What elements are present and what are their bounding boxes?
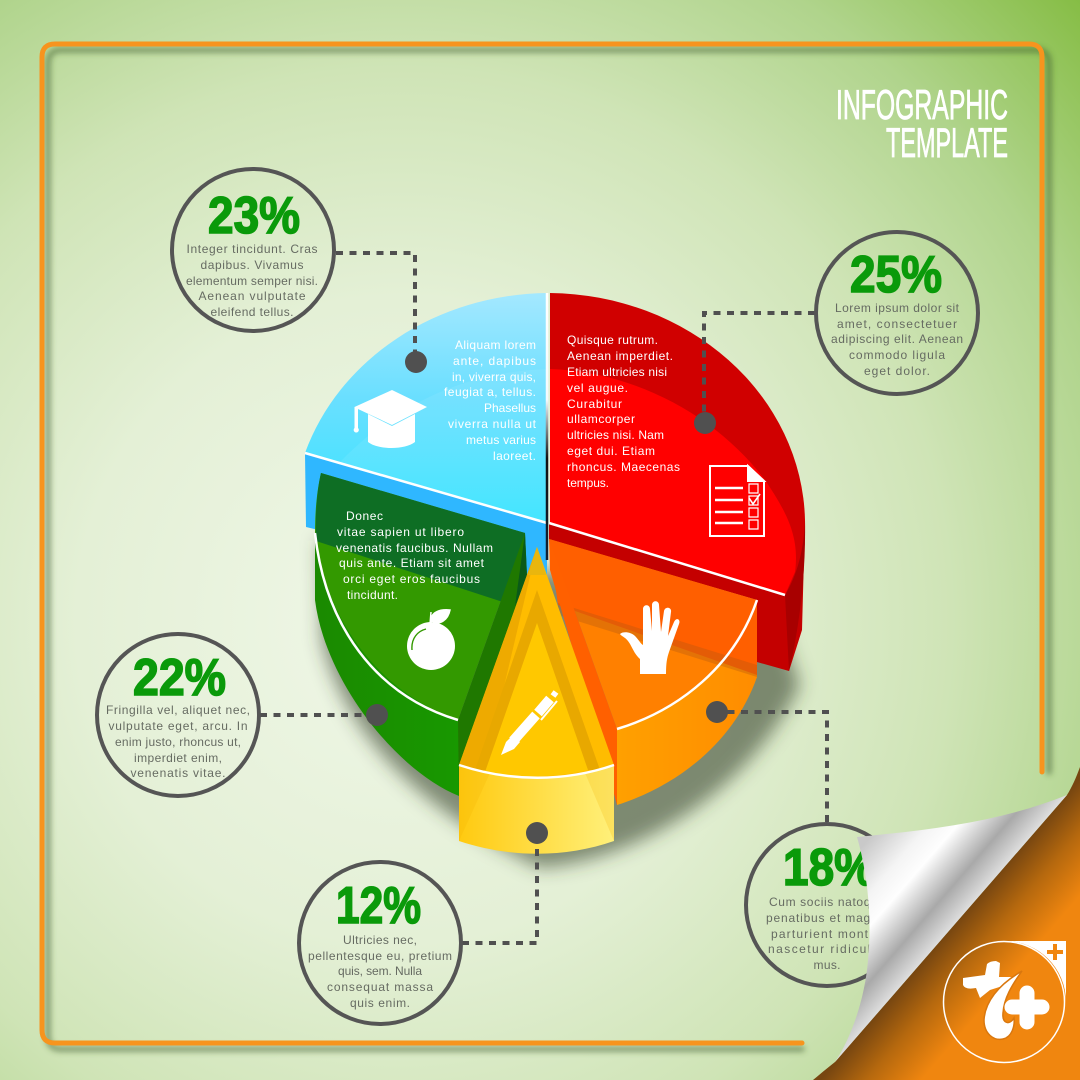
connector dots (366, 351, 728, 844)
text: green slice: venenatis faucibus. Nullam (336, 541, 493, 555)
curl: silver flap (835, 795, 1067, 1062)
text: green slice: tincidunt. (347, 588, 398, 602)
text: red slice: ullamcorper (567, 412, 635, 426)
callout: 22% (97, 634, 259, 796)
callout: 22%: enim justo, rhoncus ut, (115, 735, 241, 749)
callout: 25%: amet, consectetuer (837, 317, 957, 331)
callout: 25%: 25% (850, 246, 942, 304)
callout: 25% (816, 232, 978, 394)
callout: 18%: penatibus et magnis (766, 911, 888, 925)
slice: blue (305, 293, 547, 580)
text: blue slice: in, viverra quis, (452, 370, 536, 384)
callout: 23%: eleifend tellus. (210, 305, 294, 319)
callout: 23%: Aenean vulputate (198, 289, 306, 303)
text: red slice: eget dui. Etiam (567, 444, 655, 458)
text: red slice: ultricies nisi. Nam (567, 428, 664, 442)
callout: 25%: eget dolor. (864, 364, 930, 378)
callout: 12%: 12% (336, 877, 421, 935)
icon: hand (620, 601, 679, 674)
pie shadow (320, 540, 800, 868)
callout: 22%: venenatis vitae. (130, 766, 226, 780)
callout: 25%: Lorem ipsum dolor sit (835, 301, 960, 315)
text: red slice: Aenean imperdiet. (567, 349, 673, 363)
text: blue slice (444, 338, 537, 463)
text: blue slice: Aliquam lorem (455, 338, 536, 352)
text: blue slice: feugiat a, tellus. (444, 385, 536, 399)
callout: 12% (299, 862, 461, 1024)
text: green slice: quis ante. Etiam sit amet (339, 556, 485, 570)
icon: pen (501, 692, 557, 755)
callout: 23% (172, 169, 334, 331)
text: blue slice: ante, dapibus (453, 354, 536, 368)
title (836, 81, 1008, 166)
callout: 25%: commodo ligula (849, 348, 945, 362)
callout: 25%: adipiscing elit. Aenean (831, 332, 963, 346)
text: green slice: orci eget eros faucibus (343, 572, 480, 586)
callout: 18% (746, 824, 908, 986)
callout: 12%: Ultricies nec, (343, 933, 417, 947)
text: red slice: Etiam ultricies nisi (567, 365, 667, 379)
callout: 22%: 22% (133, 649, 226, 707)
callout: 23%: elementum semper nisi. (186, 274, 318, 288)
callout: 18%: nascetur ridiculus (768, 942, 886, 956)
text: blue slice: metus varius (466, 433, 536, 447)
callout: 12%: quis enim. (350, 996, 410, 1010)
text: red slice: Curabitur (567, 397, 622, 411)
text: green slice: vitae sapien ut libero (337, 525, 464, 539)
connector lines (260, 253, 827, 943)
slice: orange (549, 539, 757, 805)
text: blue slice: laoreet. (493, 449, 536, 463)
callout: 18%: Cum sociis natoque (769, 895, 885, 909)
callout: 22%: Fringilla vel, aliquet nec, (106, 703, 250, 717)
slice: yellow (459, 547, 614, 854)
logo (944, 941, 1066, 1062)
text: red slice: rhoncus. Maecenas (567, 460, 680, 474)
page curl (813, 767, 1080, 1080)
callout: 12%: pellentesque eu, pretium (308, 949, 452, 963)
callout: 18%: mus. (814, 958, 840, 972)
text: red slice: tempus. (567, 476, 609, 490)
callout: 18%: 18% (783, 839, 875, 897)
text: blue slice: Phasellus (484, 401, 536, 415)
icon: checklist (710, 466, 764, 536)
callout: 23%: dapibus. Vivamus (200, 258, 304, 272)
callout: 12%: quis, sem. Nulla (338, 964, 422, 978)
icon: graduation cap (354, 390, 427, 448)
slice: red (549, 293, 805, 671)
text: red slice (567, 333, 680, 490)
text: red slice: Quisque rutrum. (567, 333, 658, 347)
pie chart (305, 293, 805, 868)
text: red slice: vel augue. (567, 381, 628, 395)
callout: 18%: parturient montes (771, 927, 883, 941)
callout: 23%: 23% (208, 187, 300, 245)
text: green slice: Donec (346, 509, 383, 523)
slice: green (315, 473, 527, 796)
text: blue slice: viverra nulla ut (448, 417, 537, 431)
callout: 22%: imperdiet enim, (134, 751, 222, 765)
corner: orange (813, 767, 1080, 1080)
callout: 12%: consequat massa (327, 980, 433, 994)
callout: 23%: Integer tincidunt. Cras (186, 242, 318, 256)
icon: apple (407, 610, 455, 670)
callout: 22%: vulputate eget, arcu. In (108, 719, 248, 733)
text: green slice (336, 509, 493, 602)
